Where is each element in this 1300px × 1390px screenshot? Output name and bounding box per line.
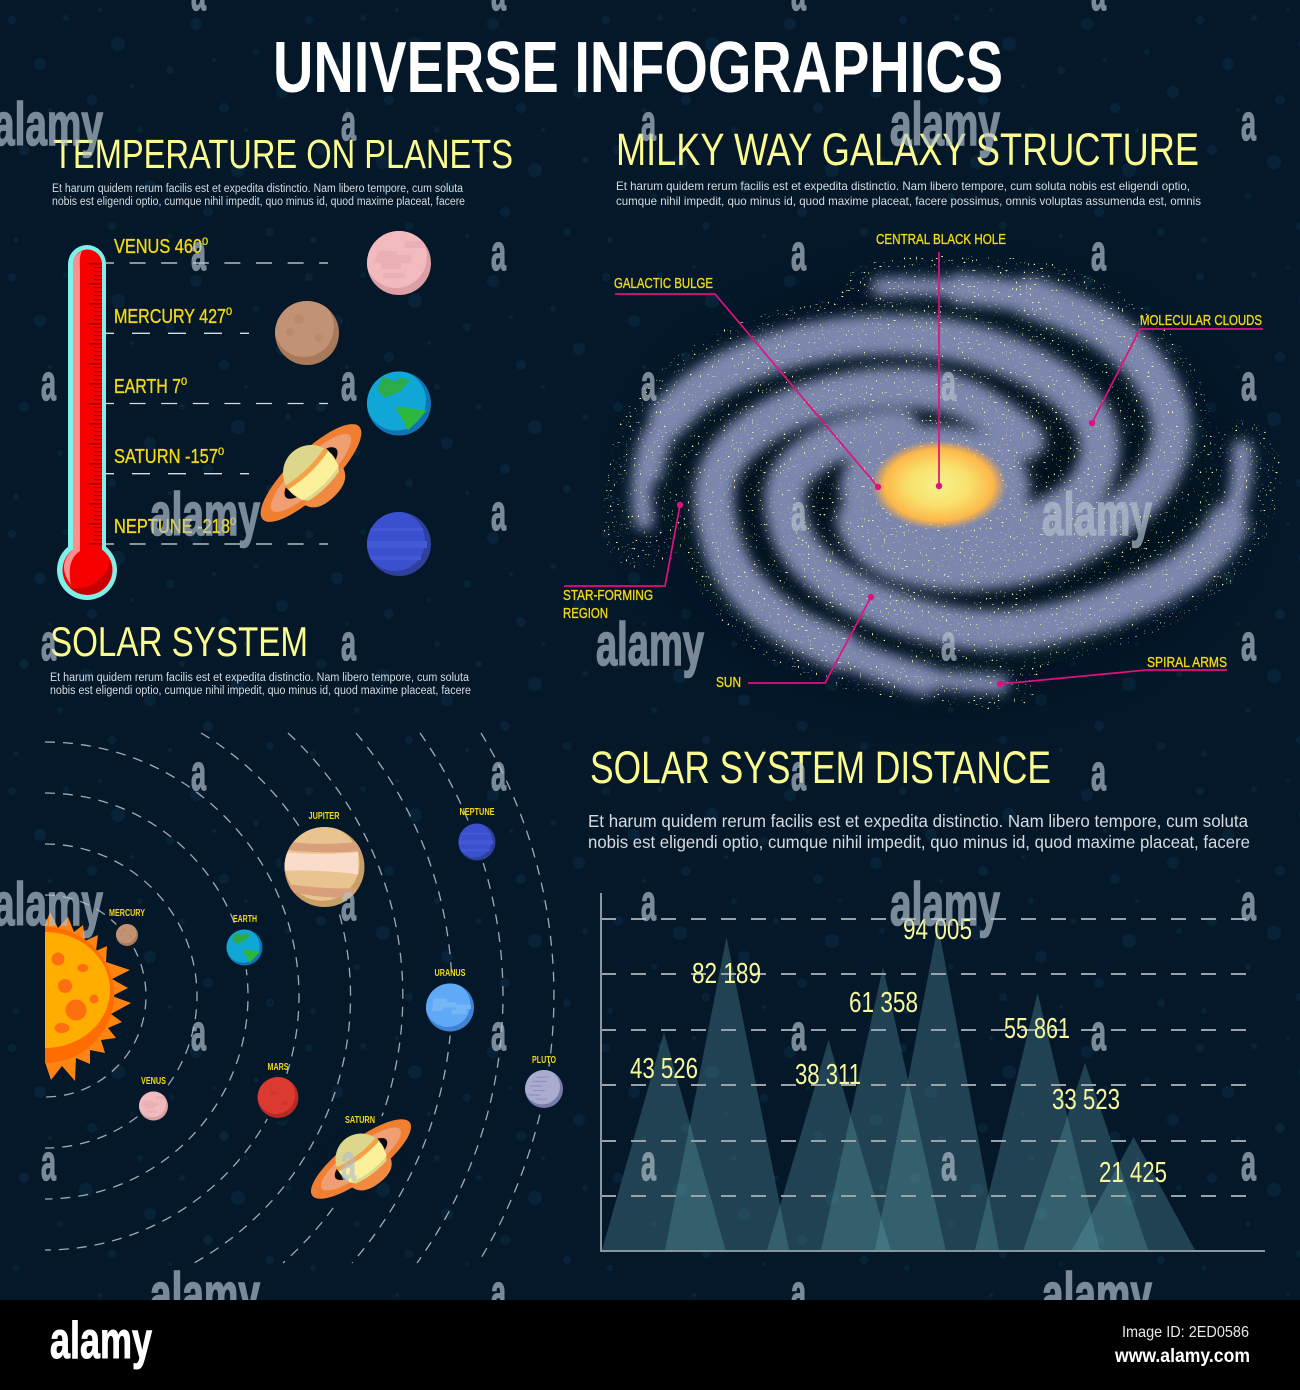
- watermarks: a: [641, 1134, 656, 1191]
- watermarks: a: [1241, 354, 1256, 411]
- planet labels: NEPTUNE: [460, 807, 495, 818]
- planet labels: VENUS: [141, 1076, 166, 1087]
- panel: milky way galaxy structure: [563, 124, 1263, 691]
- text block: solar system description: Et harum quidem rerum facilis est et expedita distinctio. Nam libero tempore, cum soluta: [50, 672, 470, 684]
- temperature labels: 0: [230, 516, 236, 528]
- watermarks: a: [791, 1004, 806, 1061]
- planet: mercury: [116, 923, 138, 946]
- temperature labels: EARTH 7: [114, 376, 181, 398]
- watermarks: a: [1241, 874, 1256, 931]
- planet: saturn: [243, 406, 382, 543]
- watermarks: a: [491, 1264, 506, 1321]
- watermarks: a: [491, 484, 506, 541]
- temperature labels: SATURN -157: [114, 446, 218, 468]
- text block: milky way description: cumque nihil impedit, quo minus id, quod maxime placeat, facere possimus, omnis voluptas assumenda est, omnis: [616, 194, 1201, 208]
- watermarks: alamy: [150, 481, 260, 548]
- text block: distance description: Et harum quidem rerum facilis est et expedita distinctio. Nam libero tempore, cum soluta: [588, 811, 1248, 831]
- watermarks: alamy: [890, 871, 1000, 938]
- watermarks: alamy: [596, 611, 704, 678]
- planet: neptune: [365, 511, 431, 576]
- footer band: alamy: [50, 1312, 152, 1370]
- watermarks: a: [341, 614, 356, 671]
- planet: earth: [226, 929, 263, 966]
- temperature labels: 0: [181, 376, 187, 388]
- planet: uranus: [425, 982, 474, 1032]
- watermarks: a: [1091, 224, 1106, 281]
- temperature labels: 0: [202, 236, 208, 248]
- text block: temperature description: [52, 183, 465, 208]
- chart values: 94 005: [903, 914, 972, 946]
- icon: sun: [45, 912, 131, 1081]
- watermarks: a: [191, 1004, 206, 1061]
- temperature labels: [114, 236, 236, 538]
- footer band: [0, 1300, 1300, 1390]
- watermarks: a: [1091, 1004, 1106, 1061]
- text block: solar system description: nobis est eligendi optio, cumque nihil impedit, quo minus id, quod maxime placeat, facere: [50, 685, 471, 697]
- chart values: 82 189: [692, 958, 761, 990]
- watermarks: a: [341, 874, 356, 931]
- watermarks: a: [941, 614, 956, 671]
- watermarks: a: [791, 1264, 806, 1321]
- chart values: 61 358: [849, 987, 918, 1019]
- galaxy labels: MOLECULAR CLOUDS: [1140, 312, 1262, 329]
- watermarks: alamy: [890, 91, 1000, 158]
- callout lines: [564, 252, 1263, 687]
- watermarks: a: [1091, 744, 1106, 801]
- planet labels: SATURN: [345, 1115, 375, 1126]
- planet: venus: [365, 226, 431, 295]
- text block: solar system description: [50, 672, 471, 697]
- galaxy labels: SPIRAL ARMS: [1147, 654, 1227, 671]
- text block: temperature description: Et harum quidem rerum facilis est et expedita distinctio. Nam libero tempore, cum soluta: [52, 183, 464, 195]
- panel: solar system distance: [588, 742, 1265, 1251]
- watermarks: a: [641, 874, 656, 931]
- temperature labels: MERCURY 427: [114, 306, 226, 328]
- triangle chart: [601, 893, 1265, 1251]
- galaxy labels: GALACTIC BULGE: [614, 275, 713, 292]
- orbits: [45, 733, 554, 1263]
- watermarks: a: [1241, 1134, 1256, 1191]
- watermarks: a: [491, 1004, 506, 1061]
- planet: saturn: [297, 1102, 428, 1220]
- watermarks: a: [791, 224, 806, 281]
- watermarks: a: [491, 224, 506, 281]
- text block: distance description: [588, 811, 1250, 852]
- heading: solar system distance: SOLAR SYSTEM DISTANCE: [590, 742, 1051, 793]
- watermarks: a: [491, 744, 506, 801]
- heading: temperature on planets: TEMPERATURE ON PLANETS: [53, 131, 513, 177]
- watermarks: a: [791, 484, 806, 541]
- stars: [643, 295, 1241, 670]
- planet labels: [109, 807, 556, 1126]
- panel: temperature on planets: [52, 131, 513, 600]
- footer band: www.alamy.com: [1114, 1346, 1250, 1367]
- watermarks: a: [41, 354, 56, 411]
- text block: milky way description: [616, 179, 1201, 208]
- watermarks: a: [341, 354, 356, 411]
- galaxy labels: [563, 231, 1262, 691]
- watermarks: a: [341, 94, 356, 151]
- temperature labels: 0: [226, 306, 232, 318]
- watermarks: alamy: [1042, 1261, 1152, 1328]
- temperature labels: NEPTUNE -218: [114, 516, 230, 538]
- chart values: 33 523: [1052, 1084, 1120, 1116]
- chart values: 21 425: [1099, 1157, 1167, 1189]
- planet: neptune: [457, 823, 495, 860]
- galactic bulge glow: [871, 440, 1007, 530]
- watermarks: a: [191, 744, 206, 801]
- text block: distance description: nobis est eligendi optio, cumque nihil impedit, quo minus id, quod maxime placeat, facere: [588, 832, 1250, 852]
- planet labels: MARS: [268, 1062, 289, 1073]
- galaxy labels: SUN: [716, 674, 741, 691]
- watermarks: alamy: [1042, 481, 1152, 548]
- planet labels: URANUS: [434, 968, 466, 979]
- watermarks: alamy: [150, 1261, 260, 1328]
- icon: thermometer: [57, 245, 117, 600]
- chart values: 38 311: [795, 1059, 861, 1091]
- watermarks: a: [41, 1134, 56, 1191]
- planet: jupiter: [282, 826, 364, 907]
- planet: venus: [138, 1089, 168, 1120]
- planet: pluto: [524, 1069, 563, 1108]
- watermarks: a: [641, 354, 656, 411]
- footer band: Image ID: 2ED0586: [1122, 1324, 1249, 1341]
- planet: earth: [366, 370, 431, 436]
- galaxy labels: CENTRAL BLACK HOLE: [876, 231, 1006, 248]
- watermarks: a: [1241, 94, 1256, 151]
- planet labels: PLUTO: [532, 1055, 556, 1066]
- galaxy labels: STAR-FORMING: [563, 587, 653, 604]
- text block: milky way description: Et harum quidem rerum facilis est et expedita distinctio. Nam libero tempore, cum soluta nobis est eligendi optio,: [616, 179, 1190, 193]
- watermarks: a: [41, 614, 56, 671]
- title: UNIVERSE INFOGRAPHICS: [273, 28, 1003, 108]
- planet: mercury: [274, 297, 339, 365]
- chart values: 55 861: [1004, 1013, 1070, 1045]
- watermarks: a: [791, 744, 806, 801]
- chart values: 43 526: [630, 1053, 698, 1085]
- watermarks: a: [191, 224, 206, 281]
- planet labels: EARTH: [233, 914, 257, 925]
- planet: mars: [257, 1076, 298, 1118]
- watermarks: a: [341, 1134, 356, 1191]
- galaxy spiral: [642, 287, 1242, 684]
- galaxy labels: REGION: [563, 605, 608, 622]
- planet labels: JUPITER: [308, 811, 340, 822]
- text block: temperature description: nobis est eligendi optio, cumque nihil impedit, quo minus id, quod maxime placeat, facere: [52, 196, 465, 208]
- watermarks: a: [641, 94, 656, 151]
- watermarks: a: [1241, 614, 1256, 671]
- heading: solar system: SOLAR SYSTEM: [50, 618, 308, 665]
- temperature labels: VENUS 460: [114, 236, 202, 258]
- temperature labels: 0: [218, 446, 224, 458]
- chart values: [630, 914, 1167, 1189]
- panel: solar system: [0, 618, 567, 1263]
- watermarks: a: [941, 354, 956, 411]
- watermarks: a: [941, 1134, 956, 1191]
- planet labels: MERCURY: [109, 908, 145, 919]
